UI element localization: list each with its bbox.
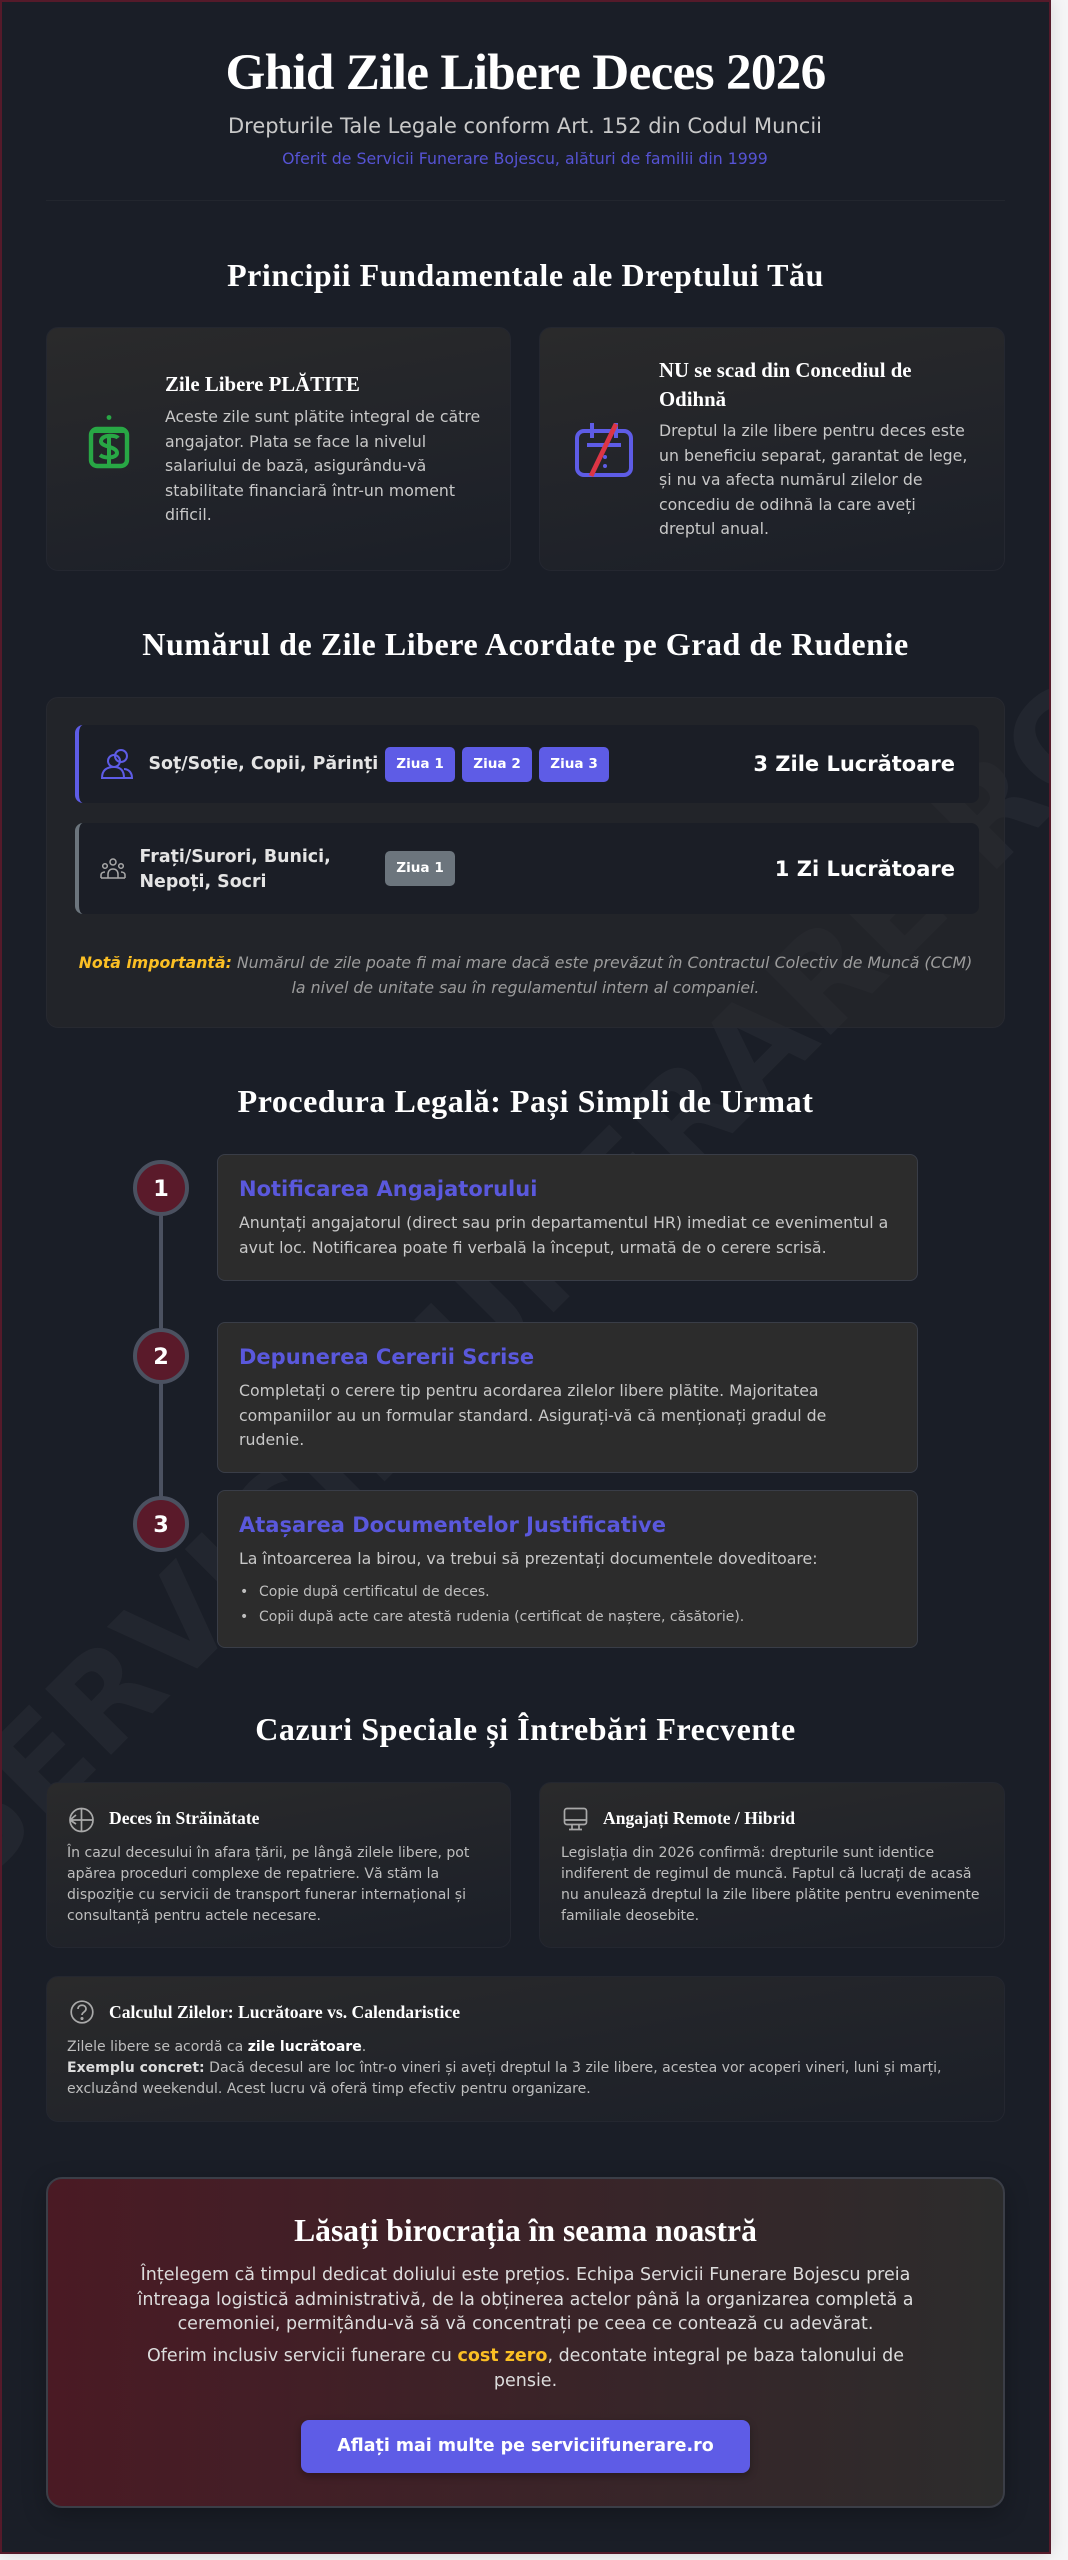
- step 1 card: [217, 1154, 918, 1281]
- row: siblings, grandparents: [75, 823, 979, 914]
- day pill: [385, 851, 455, 886]
- day pills: Ziua 2: [473, 756, 521, 772]
- card text: [67, 1844, 470, 1924]
- icon: money: [88, 415, 130, 468]
- panel: remote employees: [539, 1782, 1005, 1948]
- card text: dreptul anual.: [659, 519, 769, 538]
- icon: calendar crossed: [575, 423, 633, 477]
- document list: Copii după acte care atestă rudenia (certificat de naștere, căsătorie).: [259, 1609, 744, 1625]
- card text: [659, 421, 967, 538]
- document list: Copie după certificatul de deces.: [259, 1584, 490, 1600]
- card text: indiferent de regimul de muncă. Faptul că lucrați de acasă: [561, 1866, 971, 1882]
- card text: dificil.: [165, 505, 212, 524]
- icon: group: [100, 858, 126, 879]
- step 3 card: [217, 1490, 918, 1648]
- panel: days by kinship: [46, 697, 1005, 1028]
- step heading: Atașarea Documentelor Justificative: [239, 1513, 666, 1537]
- day pill: Ziua 1: [396, 860, 444, 876]
- step number 1: [133, 1160, 189, 1216]
- card text: concediu de odihnă la care aveți: [659, 494, 916, 514]
- timeline line: [159, 1188, 163, 1524]
- CTA offer: pensie.: [494, 2370, 557, 2390]
- card heading: [659, 359, 912, 410]
- panel: day calculation: [46, 1976, 1005, 2122]
- panel: death abroad: [46, 1782, 511, 1948]
- card text: dispoziție cu servicii de transport funerar internațional și: [67, 1887, 466, 1903]
- CTA offer: [147, 2346, 904, 2390]
- step heading: Depunerea Cererii Scrise: [239, 1345, 534, 1369]
- step number 2: [133, 1328, 189, 1384]
- panel: not deducted: [539, 327, 1005, 571]
- card text: Exemplu concret: Dacă decesul are loc într-o vineri și aveți dreptul la 3 zile libere, acestea vor acoperi vineri, luni și marți,: [67, 2060, 942, 2076]
- card text: angajator. Plata se face la nivelul: [165, 432, 426, 450]
- card heading: NU se scad din Concediul de: [659, 359, 912, 382]
- card text: În cazul decesului în afara țării, pe lângă zilele libere, pot: [67, 1845, 469, 1861]
- card heading: Zile Libere PLĂTITE: [165, 373, 360, 396]
- day pills: Ziua 3: [550, 756, 598, 772]
- day pills: Ziua 1: [396, 756, 444, 772]
- heading: procedure: Procedura Legală: Pași Simpli de Urmat: [238, 1083, 813, 1119]
- icon: monitor: [564, 1808, 588, 1830]
- step text: Anunțați angajatorul (direct sau prin departamentul HR) imediat ce evenimentul a: [239, 1213, 888, 1232]
- card text: Legislația din 2026 confirmă: drepturile sunt identice: [561, 1845, 934, 1861]
- icon: question: [70, 2000, 94, 2024]
- step text: [239, 1213, 888, 1256]
- card text: Zilele libere se acordă ca zile lucrătoare.: [67, 2039, 366, 2055]
- tagline: Oferit de Servicii Funerare Bojescu, alături de familii din 1999: [282, 149, 768, 168]
- step text: La întoarcerea la birou, va trebui să prezentați documentele doveditoare:: [239, 1549, 818, 1568]
- card text: și nu va afecta numărul zilelor de: [659, 470, 923, 489]
- title: Ghid Zile Libere Deces 2026: [225, 44, 826, 101]
- relation label: [140, 847, 331, 892]
- day pills: [385, 747, 609, 782]
- relation label: Frați/Surori, Bunici,: [140, 847, 331, 867]
- step number 3: [133, 1496, 189, 1552]
- row: spouse, children, parents: [75, 725, 979, 803]
- card text: apărea proceduri complexe de repatriere. Vă stăm la: [67, 1866, 439, 1882]
- panel: call to action: [46, 2177, 1005, 2508]
- step number 3: 3: [153, 1512, 169, 1538]
- card heading: Odihnă: [659, 388, 726, 410]
- step text: companiilor au un formular standard. Asigurați-vă că menționați gradul de: [239, 1406, 826, 1424]
- CTA button: Aflați mai multe pe serviciifunerare.ro: [337, 2436, 714, 2456]
- step 2 card: [217, 1322, 918, 1473]
- day count: 3 Zile Lucrătoare: [753, 752, 955, 776]
- important note: [79, 953, 972, 997]
- document list: •: [240, 1584, 248, 1600]
- document list: •: [240, 1609, 248, 1625]
- heading: days: Numărul de Zile Libere Acordate pe Grad de Rudenie: [142, 626, 909, 662]
- step text: Completați o cerere tip pentru acordarea zilelor libere plătite. Majoritatea: [239, 1381, 819, 1400]
- card text: [561, 1845, 980, 1924]
- CTA text: întreaga logistică administrativă, de la obținerea actelor până la organizarea completă a: [138, 2290, 913, 2310]
- card heading: Deces în Străinătate: [109, 1808, 260, 1828]
- panel: paid days: [46, 327, 511, 571]
- card text: consultanță pentru actele necesare.: [67, 1908, 321, 1924]
- step heading: Notificarea Angajatorului: [239, 1177, 537, 1201]
- card text: excluzând weekendul. Acest lucru vă oferă timp efectiv pentru organizare.: [67, 2081, 591, 2097]
- important note: la nivel de unitate sau în regulamentul intern al companiei.: [292, 978, 759, 997]
- card text: stabilitate financiară într-un moment: [165, 480, 455, 500]
- icon: two people: [101, 749, 133, 779]
- card text: [165, 407, 480, 524]
- card text: un beneficiu separat, garantat de lege,: [659, 446, 967, 464]
- important note: Notă importantă: Numărul de zile poate fi mai mare dacă este prevăzut în Contractul Colectiv de Muncă (CCM): [79, 953, 972, 972]
- step text: [239, 1381, 826, 1449]
- card text: [67, 2039, 942, 2097]
- step text: avut loc. Notificarea poate fi verbală la început, urmată de o cerere scrisă.: [239, 1238, 827, 1256]
- card heading: Calculul Zilelor: Lucrătoare vs. Calendaristice: [109, 2002, 460, 2022]
- CTA text: [137, 2264, 913, 2334]
- heading: special cases: Cazuri Speciale și Întrebări Frecvente: [255, 1711, 796, 1747]
- CTA heading: Lăsați birocrația în seama noastră: [294, 2213, 757, 2248]
- CTA button: [301, 2420, 750, 2473]
- document list: [240, 1584, 744, 1625]
- CTA text: ceremoniei, permițându-vă să vă concentrați pe ceea ce contează cu adevărat.: [178, 2314, 873, 2334]
- relation label: Nepoți, Socri: [140, 872, 266, 892]
- step text: rudenie.: [239, 1430, 304, 1449]
- icon: globe: [69, 1808, 94, 1832]
- step number 1: 1: [153, 1176, 169, 1202]
- card text: nu anulează dreptul la zile libere plătite pentru evenimente: [561, 1887, 980, 1903]
- heading: principles: Principii Fundamentale ale Dreptului Tău: [227, 257, 824, 293]
- card heading: Angajați Remote / Hibrid: [603, 1808, 795, 1828]
- relation label: Soț/Soție, Copii, Părinți: [148, 754, 378, 774]
- card text: familiale deosebite.: [561, 1908, 699, 1924]
- day count: 1 Zi Lucrătoare: [775, 857, 955, 881]
- subtitle: Drepturile Tale Legale conform Art. 152 din Codul Muncii: [228, 114, 822, 138]
- card text: Aceste zile sunt plătite integral de către: [165, 407, 480, 426]
- CTA text: Înțelegem că timpul dedicat doliului este prețios. Echipa Servicii Funerare Bojescu preia: [141, 2265, 910, 2285]
- CTA offer: Oferim inclusiv servicii funerare cu cost zero, decontate integral pe baza talonului de: [147, 2346, 904, 2366]
- step number 2: 2: [153, 1344, 169, 1370]
- card text: Dreptul la zile libere pentru deces este: [659, 421, 965, 440]
- card text: salariului de bază, asigurându-vă: [165, 456, 426, 475]
